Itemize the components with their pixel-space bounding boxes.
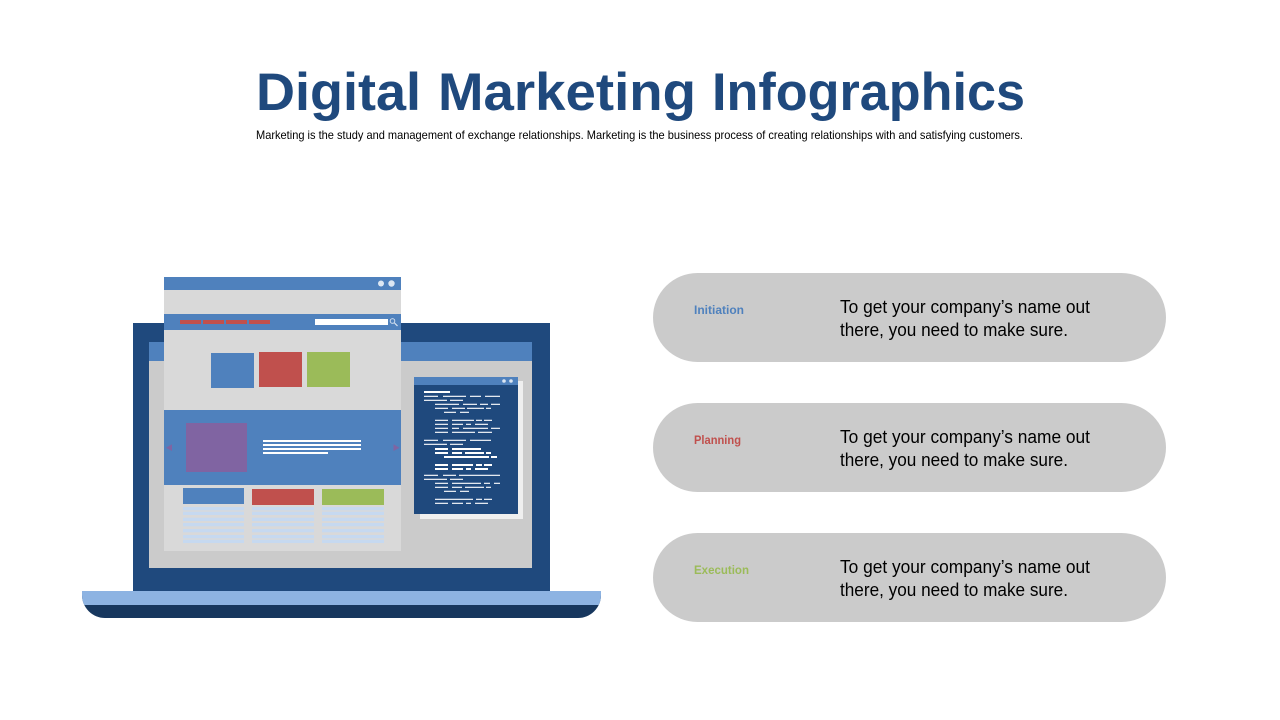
description: To get your company’s name out [840,557,1090,577]
description: To get your company’s name out [840,297,1090,317]
hero banner [164,410,401,485]
code window [414,377,523,519]
subtitle: Marketing is the study and management of exchange relationships. Marketing is the business process of creating relationships with and satisfying customers. [256,128,1023,142]
panel: planning [653,403,1166,492]
three colour squares [211,352,350,388]
browser title bar [164,277,401,290]
browser window [164,277,401,551]
laptop lid [133,323,550,591]
column one [183,488,244,543]
description: there, you need to make sure. [840,580,1068,600]
description: there, you need to make sure. [840,320,1068,340]
description: To get your company’s name out [840,427,1090,447]
title: Infographics [712,63,1025,122]
label: initiation: Initiation [694,303,744,317]
icon: search [390,319,398,326]
label: planning: Planning [694,433,741,447]
label: execution: Execution [694,563,749,577]
description [840,427,1090,470]
laptop base [82,591,601,618]
laptop screen [149,342,532,568]
description: there, you need to make sure. [840,450,1068,470]
column two [252,489,314,543]
navigation bar [164,314,401,330]
title: Digital [256,63,421,122]
description [840,557,1090,600]
description [840,297,1090,340]
title [256,63,1025,122]
panel: execution [653,533,1166,622]
column three [322,489,384,543]
laptop illustration [82,277,601,618]
code lines [424,392,500,503]
panel: initiation [653,273,1166,362]
title: Marketing [438,63,696,122]
